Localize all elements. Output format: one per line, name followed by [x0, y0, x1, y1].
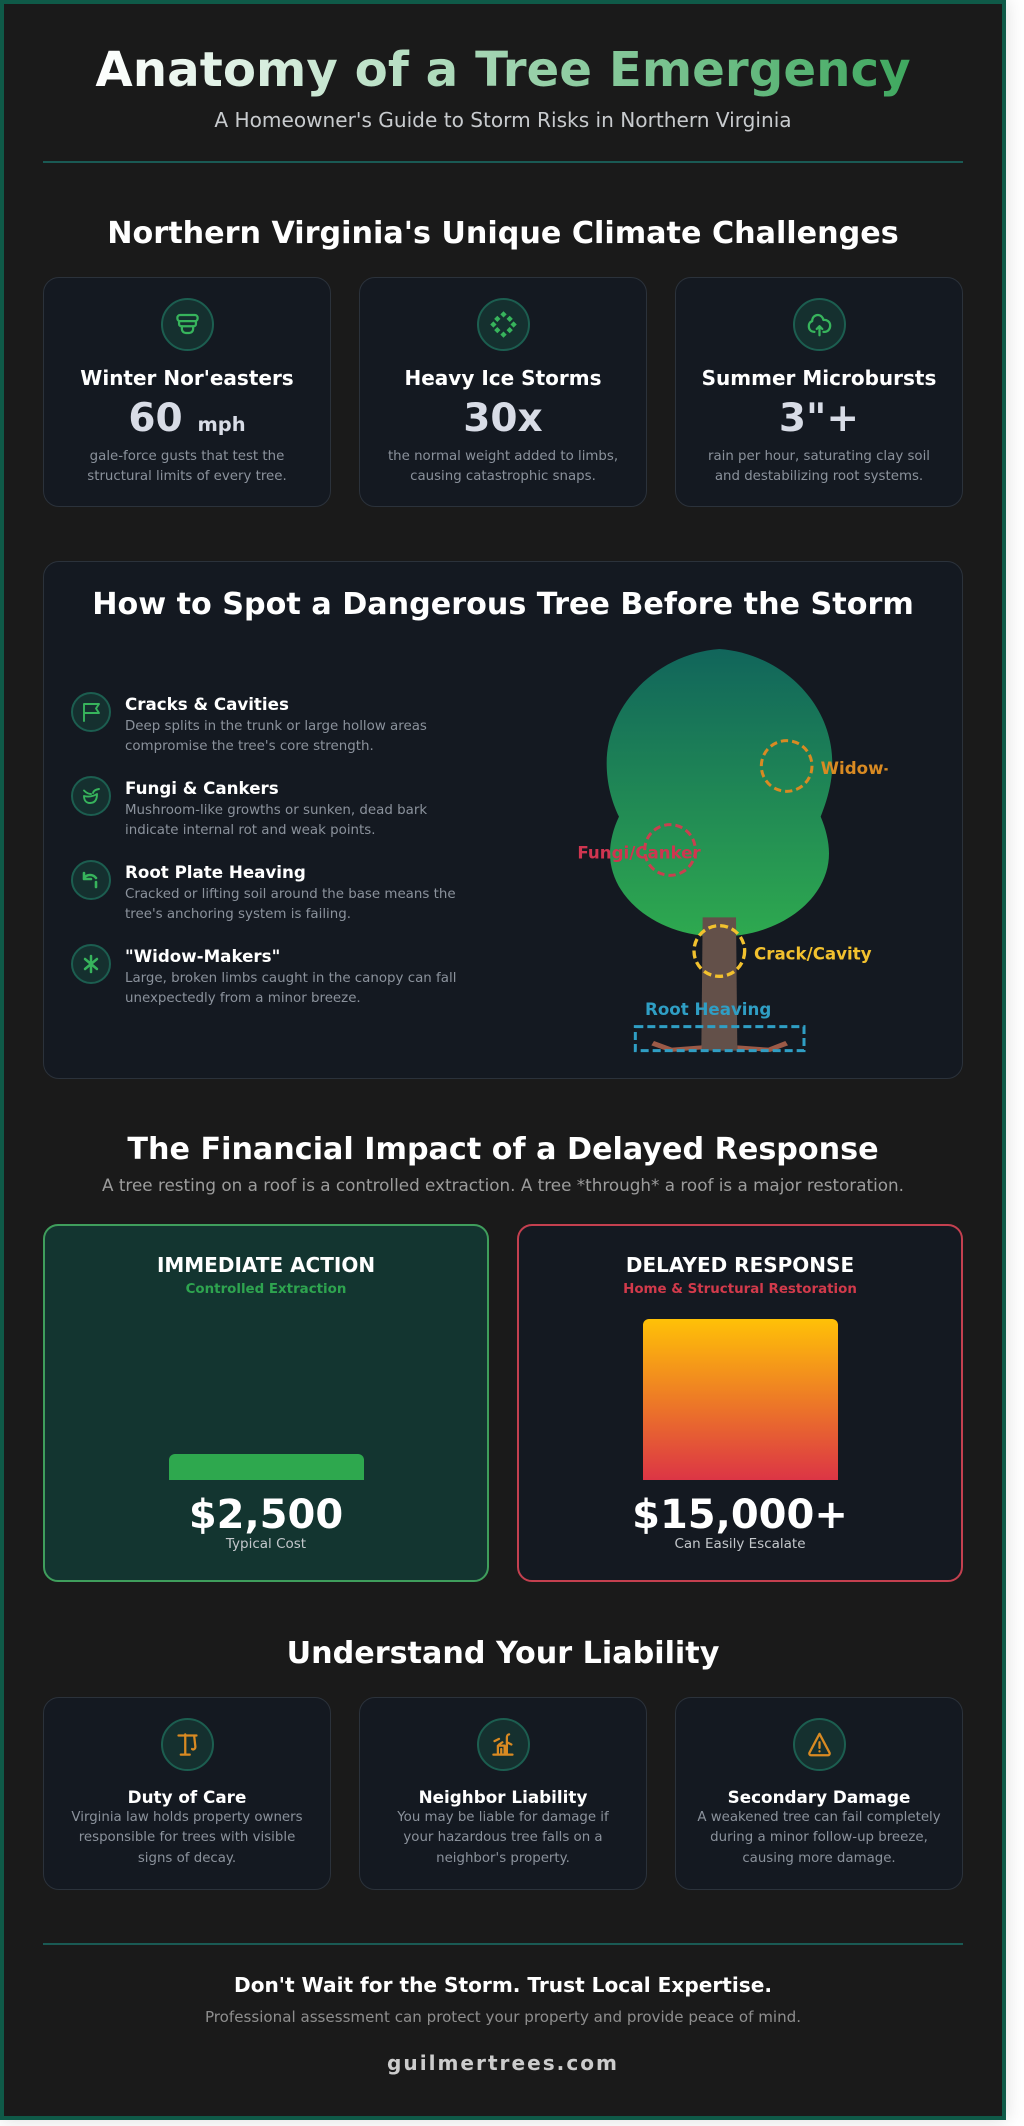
footer text: Professional assessment can protect your property and provide peace of mind.	[205, 2008, 801, 2026]
description	[388, 449, 618, 484]
warning sign: widow-makers: "Widow-Makers"	[125, 946, 280, 966]
financial subheading: A tree resting on a roof is a controlled extraction. A tree *through* a roof is a major restoration.	[102, 1175, 904, 1195]
description	[87, 449, 287, 484]
panel subtitle: Controlled Extraction	[186, 1282, 346, 1297]
canopy	[607, 649, 832, 937]
cost caption: Typical Cost	[226, 1536, 306, 1552]
card title: Summer Microbursts	[702, 366, 936, 390]
warning sign: fungi and cankers	[71, 776, 427, 838]
warning sign: cracks and cavities: Deep splits in the trunk or large hollow areas	[125, 719, 427, 734]
warning sign: widow-makers: unexpectedly from a minor breeze.	[125, 991, 361, 1006]
panel: delayed response	[517, 1224, 963, 1582]
description: Virginia law holds property owners	[71, 1810, 303, 1825]
card title: Neighbor Liability	[419, 1787, 587, 1807]
description: your hazardous tree falls on a	[403, 1830, 603, 1845]
warning sign: cracks and cavities: Cracks & Cavities	[125, 694, 289, 714]
card: heavy ice storms	[359, 277, 647, 507]
footer headline: Don't Wait for the Storm. Trust Local Expertise.	[234, 1973, 772, 1997]
warning sign: fungi and cankers: Mushroom-like growths or sunken, dead bark	[125, 803, 427, 818]
marker: crack: Crack/Cavity	[754, 944, 872, 963]
heading: financial impact: The Financial Impact of a Delayed Response	[127, 1132, 879, 1167]
roots	[651, 1041, 788, 1052]
description: rain per hour, saturating clay soil	[708, 449, 930, 464]
marker: root heaving	[635, 1000, 804, 1051]
heading: liability: Understand Your Liability	[287, 1636, 719, 1671]
description: A weakened tree can fail completely	[697, 1810, 941, 1825]
subtitle: A Homeowner's Guide to Storm Risks in Northern Virginia	[214, 108, 792, 132]
description	[697, 1810, 941, 1866]
description: the normal weight added to limbs,	[388, 449, 618, 464]
icon: warning triangle	[792, 1718, 846, 1771]
stat: 30x	[463, 396, 543, 441]
footer website: guilmertrees.com	[387, 2051, 619, 2075]
panel title: DELAYED RESPONSE	[626, 1253, 854, 1277]
card: duty of care	[43, 1697, 331, 1890]
description	[397, 1810, 609, 1866]
icon: heaving arrow	[71, 860, 111, 900]
card title: Heavy Ice Storms	[404, 366, 601, 390]
stat: 3"+	[779, 396, 859, 441]
description: You may be liable for damage if	[397, 1810, 609, 1825]
icon: flag	[71, 692, 111, 732]
description: structural limits of every tree.	[87, 469, 287, 484]
trunk	[701, 917, 737, 1051]
description: causing more damage.	[742, 1851, 896, 1866]
marker: root heaving: Root Heaving	[645, 1000, 771, 1019]
card: summer microbursts	[675, 277, 963, 507]
description	[71, 1810, 303, 1866]
icon: ice crystals	[476, 298, 530, 351]
warning sign: root plate heaving: Cracked or lifting soil around the base means the	[125, 887, 456, 902]
card: secondary damage	[675, 1697, 963, 1890]
cost bar	[168, 1454, 364, 1480]
description: during a minor follow-up breeze,	[710, 1830, 928, 1845]
card: neighbor liability	[359, 1697, 647, 1890]
marker: widow-maker	[760, 739, 888, 793]
description: gale-force gusts that test the	[90, 449, 284, 464]
marker: fungi	[577, 825, 702, 875]
icon: broken limbs	[71, 944, 111, 984]
card title: Secondary Damage	[728, 1787, 910, 1807]
marker: crack	[694, 926, 872, 976]
panel title: IMMEDIATE ACTION	[157, 1253, 375, 1277]
warning sign: root plate heaving: tree's anchoring system is failing.	[125, 907, 351, 922]
card title: Duty of Care	[128, 1787, 246, 1807]
card title: Winter Nor'easters	[80, 366, 294, 390]
panel: spot a dangerous tree	[43, 561, 963, 1079]
warning sign: cracks and cavities	[71, 692, 427, 754]
description: and destabilizing root systems.	[715, 469, 923, 484]
icon: cloud rain	[792, 298, 846, 351]
heading: climate challenges: Northern Virginia's Unique Climate Challenges	[107, 216, 899, 251]
warning sign: root plate heaving	[71, 860, 456, 922]
description: neighbor's property.	[436, 1851, 570, 1866]
icon: scale	[160, 1718, 214, 1771]
warning sign: widow-makers	[71, 944, 456, 1006]
description: signs of decay.	[138, 1851, 236, 1866]
description	[708, 449, 930, 484]
cost caption: Can Easily Escalate	[674, 1536, 806, 1552]
warning sign: cracks and cavities: compromise the tree's core strength.	[125, 739, 374, 754]
warning sign: fungi and cankers: indicate internal rot and weak points.	[125, 823, 376, 838]
title: Anatomy of a Tree Emergency	[95, 42, 911, 98]
warning sign: root plate heaving: Root Plate Heaving	[125, 862, 306, 882]
card: winter nor'easters	[43, 277, 331, 507]
icon: tornado	[160, 298, 214, 351]
heading: How to Spot a Dangerous Tree Before the Storm	[92, 587, 914, 622]
panel subtitle: Home & Structural Restoration	[623, 1282, 857, 1297]
cost amount: $2,500	[189, 1492, 343, 1538]
panel: immediate action	[43, 1224, 489, 1582]
cost amount: $15,000+	[632, 1492, 848, 1538]
description: causing catastrophic snaps.	[410, 469, 596, 484]
marker: fungi: Fungi/Canker	[577, 844, 702, 863]
warning sign: widow-makers: Large, broken limbs caught in the canopy can fall	[125, 971, 456, 986]
description: responsible for trees with visible	[79, 1830, 295, 1845]
warning sign: fungi and cankers: Fungi & Cankers	[125, 778, 279, 798]
icon: damaged house	[476, 1718, 530, 1771]
tree diagram	[577, 649, 888, 1052]
stat: 60 mph	[128, 396, 246, 441]
icon: fungus	[71, 776, 111, 816]
cost bar	[642, 1319, 838, 1480]
